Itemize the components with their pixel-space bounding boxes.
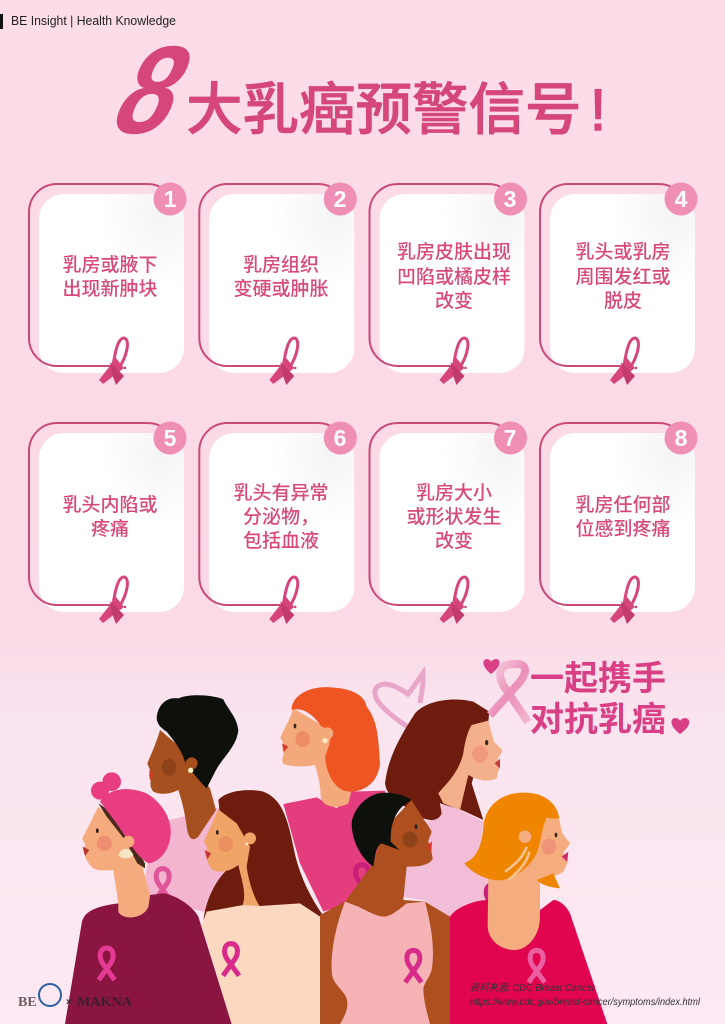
card 6: 分泌物， bbox=[243, 506, 319, 528]
card 2: 2 bbox=[334, 186, 346, 212]
card 7: 乳房大小 bbox=[416, 482, 492, 504]
woman with red hair bbox=[280, 687, 385, 912]
card 7: 或形状发生 bbox=[406, 506, 502, 528]
card 1: 1 bbox=[164, 186, 177, 212]
card 3: 改变 bbox=[435, 290, 473, 312]
woman with black hair bbox=[143, 695, 238, 917]
card 3: 凹陷或橘皮样 bbox=[397, 266, 511, 288]
card 4 bbox=[540, 182, 698, 385]
card 1: 出现新肿块 bbox=[62, 278, 158, 300]
source note: https://www.cdc.gov/breast-cancer/symptoms/index.html bbox=[470, 997, 701, 1008]
card 5: 疼痛 bbox=[91, 518, 129, 540]
card 7 bbox=[370, 422, 527, 624]
card 5 bbox=[29, 422, 186, 624]
slogan bbox=[530, 651, 666, 741]
title: 8 bbox=[94, 20, 213, 160]
card 5: 5 bbox=[164, 425, 177, 451]
card 4: 脱皮 bbox=[604, 290, 642, 312]
icon: heart left bbox=[483, 659, 500, 674]
card 3: 3 bbox=[504, 186, 516, 212]
card 2: 变硬或肿胀 bbox=[233, 278, 329, 300]
icon: heart right bbox=[671, 718, 689, 734]
card 3: 乳房皮肤出现 bbox=[397, 241, 511, 263]
card 6: 包括血液 bbox=[243, 530, 319, 552]
card 6: 乳头有异常 bbox=[233, 482, 329, 504]
title: ! bbox=[590, 78, 606, 143]
woman with brown hair bbox=[202, 790, 322, 1024]
header label: BE Insight | Health Knowledge bbox=[11, 14, 176, 28]
card 1: 乳房或腋下 bbox=[62, 254, 158, 276]
heart shaped ribbon bbox=[375, 673, 423, 730]
logos: MAKNA bbox=[77, 995, 133, 1010]
logos: × bbox=[66, 997, 72, 1008]
card 4: 乳头或乳房 bbox=[575, 241, 671, 263]
card 8: 位感到疼痛 bbox=[575, 518, 671, 540]
slogan: 一起携手 bbox=[530, 651, 666, 700]
card 6: 6 bbox=[334, 425, 346, 451]
card 8 bbox=[540, 422, 698, 624]
woman with pink turban bbox=[65, 772, 232, 1024]
pink ribbon bbox=[490, 664, 528, 722]
source note: 资料来源: CDC Breast Cancer bbox=[470, 982, 596, 994]
card 4: 周围发红或 bbox=[575, 266, 671, 288]
card 5: 乳头内陷或 bbox=[62, 494, 158, 516]
card 1 bbox=[29, 182, 186, 385]
woman with long brown hair bbox=[385, 699, 502, 917]
card 7: 改变 bbox=[435, 530, 473, 552]
card 7: 7 bbox=[504, 425, 516, 451]
logos bbox=[18, 984, 133, 1010]
card 8: 乳房任何部 bbox=[575, 494, 671, 516]
title bbox=[94, 20, 606, 160]
card 2 bbox=[199, 182, 357, 385]
source note bbox=[470, 982, 701, 1008]
woman with orange hair bbox=[450, 793, 607, 1024]
card 6 bbox=[199, 422, 357, 624]
logos: BE bbox=[18, 995, 37, 1010]
title: 大乳癌预警信号 bbox=[186, 64, 582, 146]
card 8: 8 bbox=[675, 425, 688, 451]
illustration: group of women bbox=[65, 687, 607, 1024]
slogan: 对抗乳癌 bbox=[530, 692, 666, 741]
card 2: 乳房组织 bbox=[243, 254, 319, 276]
card 4: 4 bbox=[675, 186, 688, 212]
card 3 bbox=[370, 182, 527, 385]
woman with short dark hair bbox=[320, 793, 450, 1024]
